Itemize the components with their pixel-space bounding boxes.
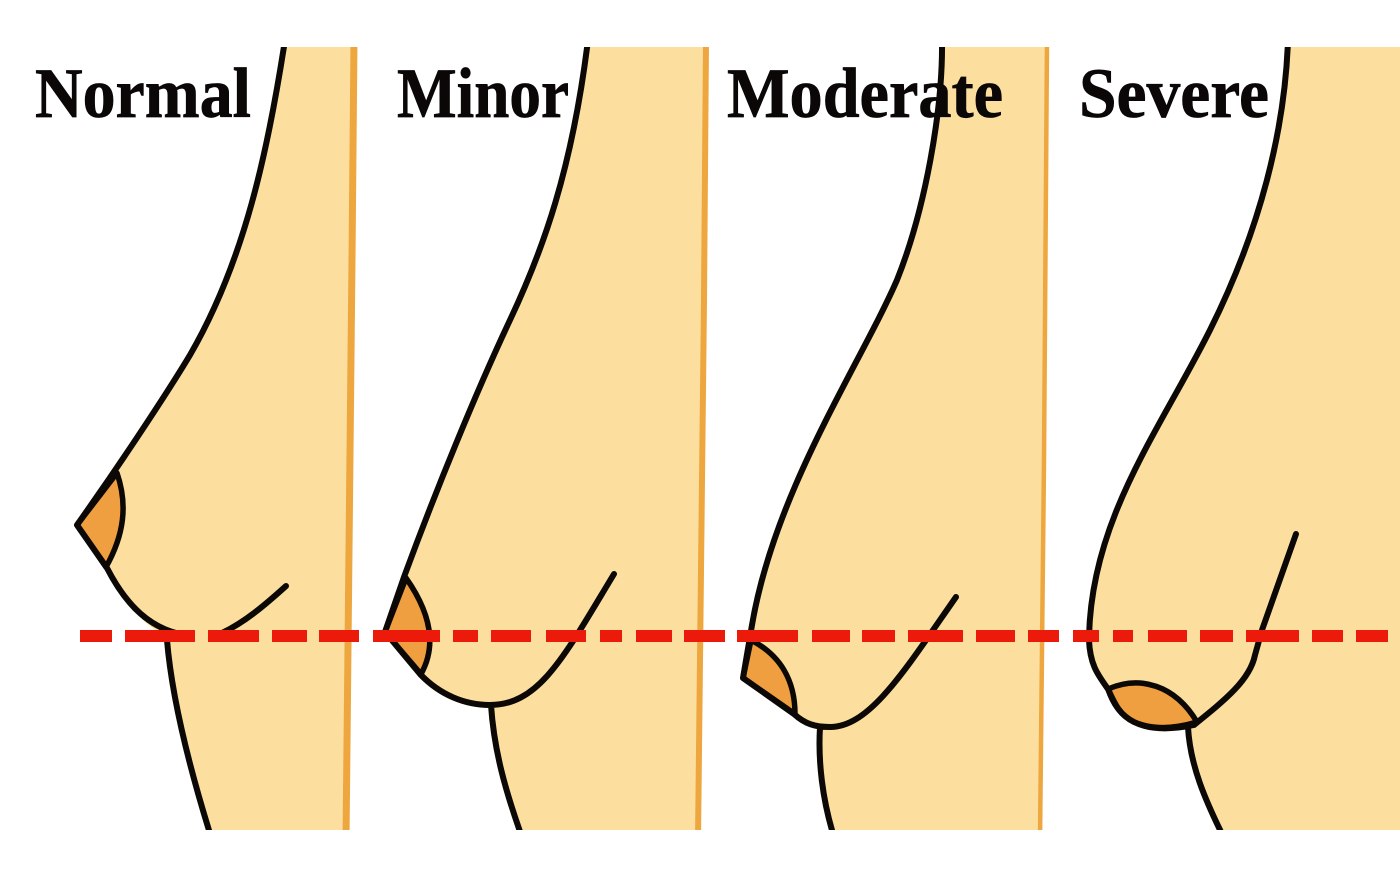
label: Severe: Severe (1079, 55, 1269, 133)
outline: minor (385, 40, 614, 840)
label: Normal: Normal (35, 55, 251, 133)
reference edge: normal (346, 40, 354, 840)
body fill: moderate (743, 40, 1049, 840)
outline: normal (77, 40, 286, 840)
areola: moderate (743, 640, 795, 714)
body fill: severe (1089, 40, 1400, 840)
outline: severe (1089, 40, 1296, 840)
reference edge: moderate (1040, 40, 1047, 840)
areola: minor (385, 578, 430, 674)
label: Moderate: Moderate (727, 55, 1003, 133)
panel: minor (385, 40, 709, 840)
reference line: red dashed (80, 630, 1388, 642)
areola: severe (1108, 683, 1197, 728)
panel: severe (1089, 40, 1400, 840)
label: Minor: Minor (397, 55, 569, 133)
panel: normal (77, 40, 357, 840)
outline: moderate (743, 40, 956, 840)
areola: normal (77, 473, 123, 567)
body fill: minor (385, 40, 709, 840)
body fill: normal (110, 47, 350, 830)
reference edge: minor (698, 40, 706, 840)
panel: moderate (743, 40, 1049, 840)
